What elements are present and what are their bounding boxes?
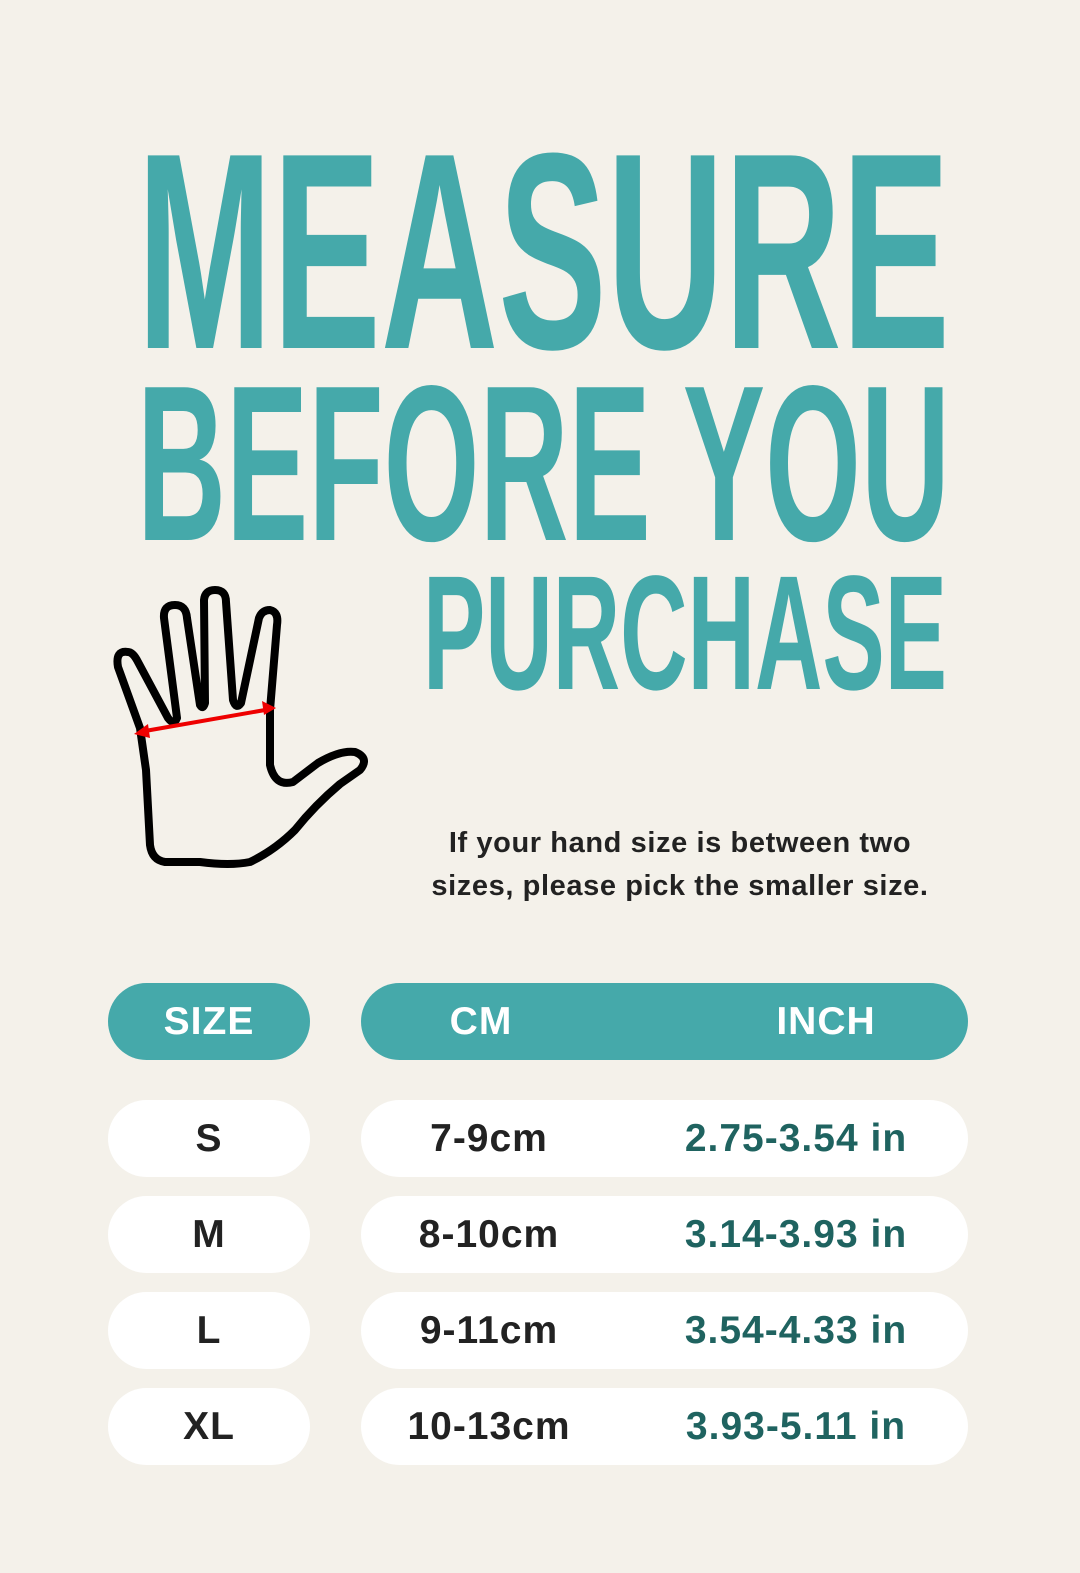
header: size	[108, 983, 310, 1060]
header: cm inch: CM	[450, 1000, 512, 1042]
row S	[108, 1100, 968, 1177]
row M	[108, 1196, 968, 1273]
row L: 9-11cm	[420, 1308, 558, 1352]
row M: 8-10cm	[419, 1212, 559, 1256]
row XL	[108, 1388, 968, 1465]
header: size: SIZE	[164, 1000, 254, 1042]
row S: 2.75-3.54 in	[685, 1116, 907, 1160]
row L: L	[197, 1308, 221, 1352]
row XL: 3.93-5.11 in	[686, 1404, 906, 1448]
header: cm inch	[361, 983, 968, 1060]
row L: 3.54-4.33 in	[685, 1308, 907, 1352]
row XL: 10-13cm	[407, 1404, 571, 1448]
note text: sizes, please pick the smaller size.	[431, 870, 929, 902]
header: cm inch: INCH	[776, 1000, 876, 1042]
title	[137, 96, 950, 720]
icon: hand with measurement arrow	[113, 586, 368, 868]
row M: 3.14-3.93 in	[685, 1212, 907, 1256]
row L	[108, 1292, 968, 1369]
row M: M	[192, 1212, 226, 1256]
note text: If your hand size is between two	[449, 827, 911, 859]
row XL: XL	[183, 1404, 235, 1448]
row S: S	[195, 1116, 222, 1160]
note text	[431, 827, 929, 902]
row S: 7-9cm	[430, 1116, 548, 1160]
